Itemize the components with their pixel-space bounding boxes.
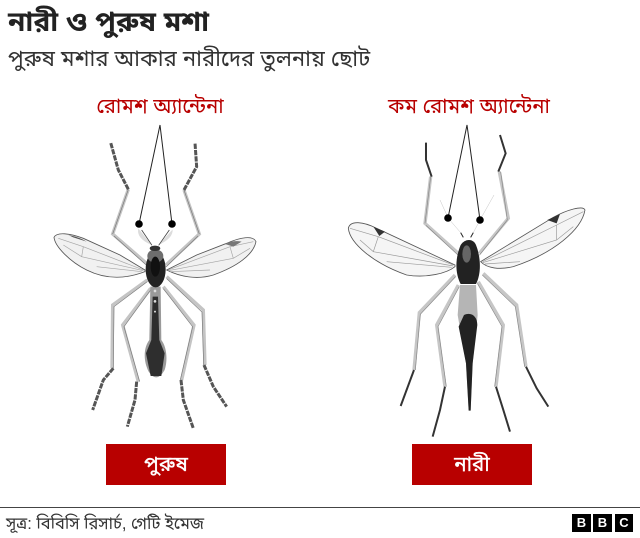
- pointer lines: female: [448, 125, 480, 220]
- source text: সূত্র: বিবিসি রিসার্চ, গেটি ইমেজ: [6, 515, 204, 533]
- wings: [54, 234, 145, 277]
- antennae: [461, 233, 473, 237]
- pointer dots: male: [135, 220, 176, 228]
- title: নারী ও পুরুষ মশা: [8, 6, 209, 37]
- pointer lines: male: [139, 125, 172, 224]
- thorax: [456, 240, 480, 284]
- abdomen: [145, 287, 166, 377]
- hairy antennae: [138, 228, 173, 245]
- button: female: [412, 444, 532, 485]
- female mosquito: [348, 135, 585, 437]
- wings: [348, 223, 455, 276]
- pointer dots: female: [444, 214, 484, 224]
- label: male antenna: রোমশ অ্যান্টেনা: [96, 96, 224, 118]
- BBC logo: B: [577, 515, 586, 530]
- footer rule: [0, 507, 640, 508]
- abdomen: [458, 285, 478, 410]
- subtitle: পুরুষ মশার আকার নারীদের তুলনায় ছোট: [8, 46, 370, 71]
- BBC logo: [572, 514, 633, 532]
- BBC logo: B: [598, 515, 607, 530]
- button: male: [106, 444, 226, 485]
- BBC logo: C: [619, 515, 629, 530]
- button: male: পুরুষ: [144, 453, 188, 476]
- label: female antenna: কম রোমশ অ্যান্টেনা: [388, 96, 550, 118]
- male mosquito: [54, 143, 256, 428]
- thorax: [146, 251, 166, 287]
- button: female: নারী: [454, 453, 490, 476]
